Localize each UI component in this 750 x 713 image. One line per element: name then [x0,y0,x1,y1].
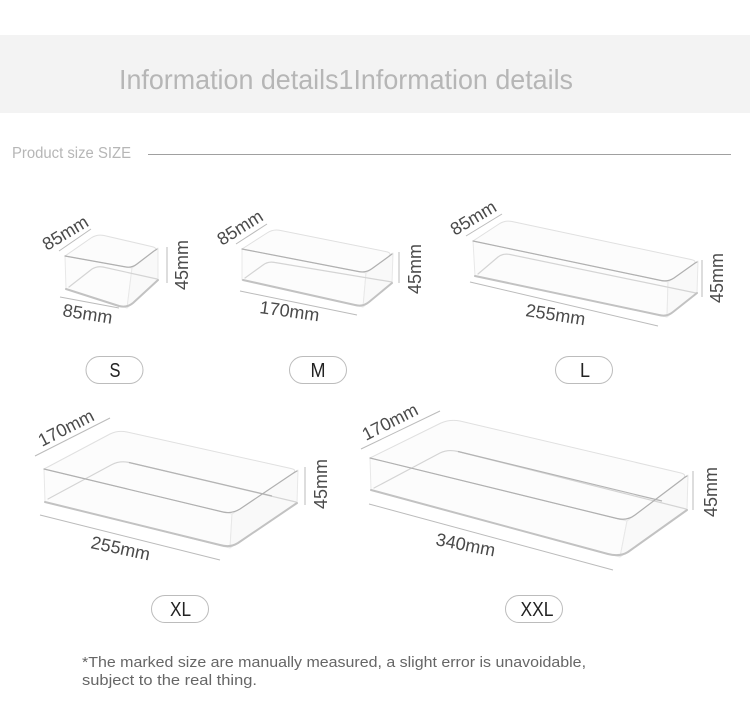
dimension height L: 45mm [707,253,727,303]
dimension length M: 170mm [258,297,321,325]
size label S [86,356,143,384]
dimension length L: 255mm [524,300,587,329]
dimension height S: 45mm [172,240,192,290]
box L drawing [473,221,698,317]
dimension width XXL: 170mm [359,399,421,445]
size label M: M [310,360,326,382]
dimension length L [470,282,658,329]
dimension length XXL: 340mm [434,529,497,560]
header band [0,35,750,113]
dimension length XL [40,515,220,564]
product: size M box [214,206,425,384]
dimension height M: 45mm [405,244,425,294]
size label XXL [506,596,562,622]
box XXL drawing [370,420,688,557]
dimension height XXL: 45mm [701,467,721,517]
product: size XL box [35,405,331,622]
footnote [82,654,586,689]
dimension height XL: 45mm [311,459,331,509]
box M drawing [242,230,393,307]
footnote: *The marked size are manually measured, a slight error is unavoidable, [82,654,586,671]
section heading: product size: Product size SIZE [12,145,131,162]
product: size XXL box [359,399,721,622]
size label S: S [110,360,120,382]
dimension width M: 85mm [214,206,267,249]
product: size S box [39,212,192,384]
dimension width L: 85mm [447,197,500,239]
size label XXL: XXL [520,599,554,621]
dimension length M [240,291,357,325]
box XL drawing [44,431,298,548]
dimension length S: 85mm [61,300,114,328]
page title: Information details1Information details [119,64,573,95]
size label XL [152,596,208,622]
size label L [556,356,612,384]
product: size L box [447,197,727,384]
footnote: subject to the real thing. [82,672,257,689]
size label XL: XL [170,599,191,621]
dimension width S: 85mm [39,212,92,254]
size label M [290,356,346,384]
dimension width XL: 170mm [35,405,97,451]
dimension length XL: 255mm [89,532,152,564]
dimension length XXL [369,504,613,570]
size label L: L [580,360,590,382]
box S drawing [65,235,158,308]
